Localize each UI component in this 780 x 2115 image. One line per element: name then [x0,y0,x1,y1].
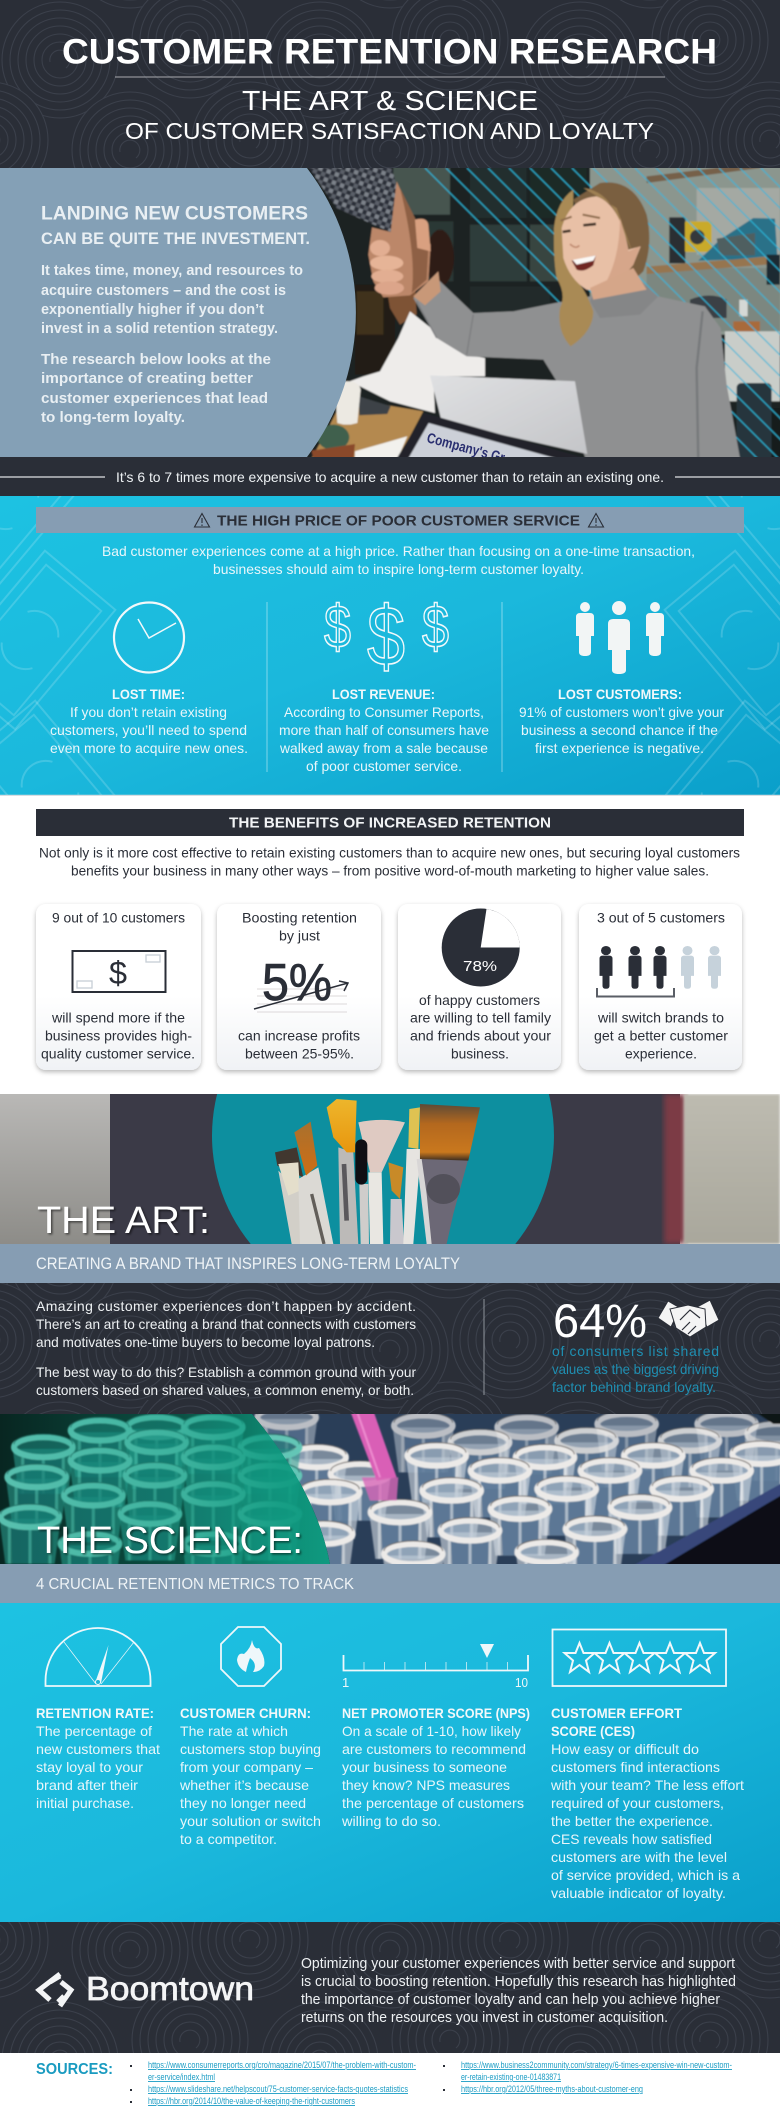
stat description: factor behind brand loyalty. [552,1379,716,1395]
icon: handshake [658,1300,719,1337]
card: boosting retention: by just [279,928,320,944]
icon: flame octagon [221,1627,281,1686]
metric: net promoter score [341,1644,530,1829]
metric: net promoter score: are customers to recommend [342,1741,526,1757]
metric: net promoter score: they know? NPS measures [342,1777,510,1793]
benefits banner [36,809,744,836]
card: boosting retention: Boosting retention [242,910,357,926]
column: lost time: customers, you’ll need to spend [50,722,247,738]
metric: net promoter score: the percentage of customers [342,1795,524,1811]
panel: benefits of increased retention [0,796,780,1094]
card: 78 percent [398,904,561,1070]
intro paragraph two [41,352,271,426]
heading: the art: THE ART: [37,1200,210,1242]
card: 3 out of 5 customers: 3 out of 5 customers [597,910,725,926]
metric: customer effort score: CUSTOMER EFFORT [551,1705,682,1721]
icon: dollar bill: $ [109,955,127,991]
stat description: of consumers list shared [552,1343,719,1359]
sources heading: SOURCES: [36,2061,113,2078]
art text: Amazing customer experiences don’t happen by accident. [36,1298,416,1314]
metric: customer effort score: How easy or difficult do [551,1741,699,1757]
card: 9 out of 10 customers: business provides high- [45,1028,192,1044]
panel: footer [0,1922,780,2053]
metric: customer effort score: customers find interactions [551,1759,720,1775]
column: lost customers: LOST CUSTOMERS: [558,686,682,702]
column: lost customers: business a second chance if the [521,722,718,738]
curved panel [0,168,356,457]
chart: nps scale: 10 [515,1675,528,1690]
metric: customer churn: The rate at which [180,1723,288,1739]
art text: The best way to do this? Establish a common ground with your [36,1364,416,1380]
intro paragraph one [41,263,303,337]
metric: customer effort score: SCORE (CES) [551,1723,635,1739]
icon: dollar signs: $ [324,593,351,660]
icon: people [576,601,664,674]
stat: 64 percent: 64% [553,1294,647,1347]
title: CUSTOMER RETENTION RESEARCH [62,32,717,72]
source links column one: er-service/index.html [148,2072,215,2082]
metric: retention rate: initial purchase. [36,1795,134,1811]
panel: sources [0,2053,780,2115]
card: 3 out of 5 customers [579,904,742,1070]
metric: customer effort score: customers are with the level [551,1849,727,1865]
metric: customer churn: customers stop buying [180,1741,321,1757]
intro paragraph one: acquire customers – and the cost is [41,283,286,299]
photo label: company guide: Company's Gr [425,430,507,467]
source links column one: https://www.consumerreports.org/cro/magazine/2015/07/the-problem-with-custom- [148,2060,416,2070]
closing text: returns on the resources you invest in customer acquisition. [301,2009,668,2026]
source links column one [148,2060,416,2106]
column: lost customers: first experience is negative. [535,740,704,756]
source links column two: https://hbr.org/2012/05/three-myths-about-customer-eng [461,2084,643,2094]
heading: the science: THE SCIENCE: [37,1520,303,1562]
column: lost revenue: walked away from a sale because [279,740,488,756]
source links column two [461,2060,732,2094]
metric: retention rate: RETENTION RATE: [36,1705,154,1721]
intro paragraph two: customer experiences that lead [41,391,268,407]
column: lost revenue: LOST REVENUE: [332,686,435,702]
metric: retention rate [36,1628,160,1811]
card: 9 out of 10 customers [36,904,201,1070]
metric: net promoter score: On a scale of 1-10, how likely [342,1723,521,1739]
section intro: Bad customer experiences come at a high price. Rather than focusing on a one-time transaction, [102,543,695,559]
card: boosting retention: can increase profits [238,1028,360,1044]
metric: customer effort score: the better the experience. [551,1813,713,1829]
section intro: businesses should aim to inspire long-term customer loyalty. [213,561,584,577]
metric: customer churn: from your company – [180,1759,313,1775]
intro paragraph two: importance of creating better [41,371,253,387]
intro heading: CAN BE QUITE THE INVESTMENT. [41,230,310,248]
metric: net promoter score: your business to someone [342,1759,507,1775]
icon: dollar signs: $ [422,593,449,660]
column: lost revenue: According to Consumer Reports, [284,704,484,720]
chart: pie 78 percent [442,908,520,986]
stat band: It’s 6 to 7 times more expensive to acquire a new customer than to retain an existing one. [116,469,664,485]
icon: dollar bill [72,951,166,992]
chart: pie 78 percent: 78% [463,958,497,975]
intro paragraph two: The research below looks at the [41,352,271,368]
metric: retention rate: new customers that [36,1741,160,1757]
column: lost customers [519,686,724,756]
benefits intro [39,844,740,878]
section banner [36,507,744,533]
metric: customer effort score [550,1630,744,1901]
card: 78 percent: business. [451,1046,509,1062]
source links column one: https://hbr.org/2014/10/the-value-of-keeping-the-right-customers [148,2096,355,2106]
band: retention metrics [0,1564,780,1603]
metric: retention rate: The percentage of [36,1723,152,1739]
stat: 64 percent [553,1294,719,1347]
card: 3 out of 5 customers: will switch brands to [597,1010,724,1026]
metric: customer effort score: CES reveals how satisfied [551,1831,712,1847]
column: lost revenue [279,686,489,774]
card: 9 out of 10 customers: 9 out of 10 customers [52,910,185,926]
icon: dollar signs [324,589,449,683]
card: boosting retention [217,904,381,1070]
icon: warning right [588,514,604,527]
metric: retention rate: stay loyal to your [36,1759,143,1775]
metric: customer effort score: of service provided, which is a [551,1867,740,1883]
section intro [102,543,695,577]
intro paragraph one: invest in a solid retention strategy. [41,321,278,337]
panel: the science image [0,1414,780,1564]
icon: clock [114,602,184,672]
intro paragraph one: It takes time, money, and resources to [41,263,303,279]
chart: nps scale [342,1644,528,1690]
metric: customer churn: to a competitor. [180,1831,277,1847]
panel: high price of poor customer service [0,496,780,796]
source links column one: https://www.slideshare.net/helpscout/75-customer-service-facts-quotes-statistics [148,2084,408,2094]
art text [36,1298,416,1398]
icon: five stars [552,1630,726,1686]
card: 9 out of 10 customers: quality customer service. [41,1046,195,1062]
card: boosting retention: between 25-95%. [245,1046,354,1062]
metric: customer churn: CUSTOMER CHURN: [180,1705,311,1721]
metric: customer effort score: valuable indicator of loyalty. [551,1885,726,1901]
subtitle line two: OF CUSTOMER SATISFACTION AND LOYALTY [125,118,654,144]
stat description: values as the biggest driving [552,1361,719,1377]
column: lost time: LOST TIME: [112,686,185,702]
card: 78 percent: and friends about your [410,1028,551,1044]
section banner: THE HIGH PRICE OF POOR CUSTOMER SERVICE [217,513,580,530]
art text: and motivates one-time buyers to become loyal patrons. [36,1334,375,1350]
intro paragraph one: exponentially higher if you don’t [41,302,264,318]
metric: net promoter score: NET PROMOTER SCORE (NPS) [342,1705,530,1721]
metric: net promoter score: willing to do so. [341,1813,441,1829]
icon: five people [597,946,721,996]
source links column two: er-retain-existing-one-01483871 [461,2072,561,2082]
column: lost revenue: more than half of consumers have [279,722,489,738]
column: lost time: If you don’t retain existing [70,704,227,720]
metric: customer churn: whether it’s because [179,1777,309,1793]
card: 78 percent: are willing to tell family [410,1010,551,1026]
column: lost revenue: of poor customer service. [306,758,462,774]
metric: retention rate: brand after their [36,1777,138,1793]
card: 9 out of 10 customers: will spend more if the [51,1010,185,1026]
card: 78 percent: of happy customers [419,992,540,1008]
benefits banner: THE BENEFITS OF INCREASED RETENTION [229,815,551,832]
logo: Boomtown: Boomtown [86,1970,254,2007]
intro heading: LANDING NEW CUSTOMERS [41,203,308,224]
column: lost time: even more to acquire new ones. [50,740,248,756]
panel: hero photo with intro text [0,165,780,476]
chart: 5 percent growth: 5% [262,954,332,1012]
closing text [301,1955,736,2026]
closing text: Optimizing your customer experiences with better service and support [301,1955,736,1972]
metric: customer churn: your solution or switch [180,1813,321,1829]
stat description [552,1343,719,1395]
band: retention metrics: 4 CRUCIAL RETENTION METRICS TO TRACK [36,1576,354,1593]
intro paragraph two: to long-term loyalty. [41,410,185,426]
closing text: the importance of customer loyalty and can help you achieve higher [301,1991,720,2008]
art text: customers based on shared values, a common enemy, or both. [36,1382,414,1398]
icon: gauge [46,1628,150,1686]
column: lost time [50,686,248,756]
chart: nps scale: 1 [342,1675,349,1690]
subtitle line one: THE ART & SCIENCE [242,85,538,116]
icon: warning left [194,514,210,527]
panel: art body [0,1283,780,1414]
band: creating a brand: CREATING A BRAND THAT INSPIRES LONG-TERM LOYALTY [36,1254,460,1273]
metric: customer churn: they no longer need [180,1795,306,1811]
metric: customer effort score: required of your customers, [551,1795,724,1811]
intro heading [41,203,310,248]
benefits intro: Not only is it more cost effective to retain existing customers than to acquire new ones, but securing loyal customers [39,844,740,860]
benefits intro: benefits your business in many other ways – from positive word-of-mouth marketing to higher value sales. [71,862,709,878]
band: creating a brand [0,1244,780,1283]
card: 3 out of 5 customers: experience. [625,1046,697,1062]
metric: customer effort score: with your team? The less effort [550,1777,744,1793]
panel: the art image [0,1094,780,1244]
panel: metrics [0,1603,780,1922]
panel: header [0,0,780,168]
card: 3 out of 5 customers: get a better customer [594,1028,728,1044]
metric: customer churn [179,1627,321,1847]
icon: dollar signs: $ [367,589,405,683]
column: lost customers: 91% of customers won’t give your [519,704,724,720]
stat band [0,457,780,496]
closing text: is crucial to boosting retention. Hopefully this research has highlighted [301,1973,736,1990]
art text: There’s an art to creating a brand that connects with customers [36,1316,416,1332]
